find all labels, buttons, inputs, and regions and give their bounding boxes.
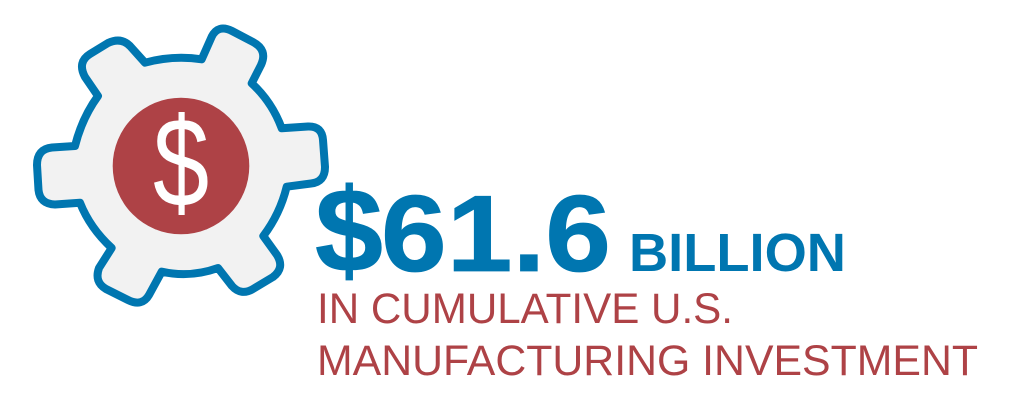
unit: BILLION	[629, 223, 846, 283]
amount: digits: 61.6	[381, 173, 611, 295]
headline figure: $61.6 billion	[315, 163, 846, 297]
gear outline	[37, 29, 325, 303]
dollar sign: $	[153, 92, 209, 234]
second line: MANUFACTURING INVESTMENT	[317, 337, 978, 385]
first line: IN CUMULATIVE U.S.	[317, 285, 733, 333]
amount: dollar sign: $	[315, 163, 383, 297]
subtitle text	[317, 285, 978, 385]
icon: gear with dollar sign	[37, 29, 325, 303]
red center circle	[113, 98, 249, 234]
